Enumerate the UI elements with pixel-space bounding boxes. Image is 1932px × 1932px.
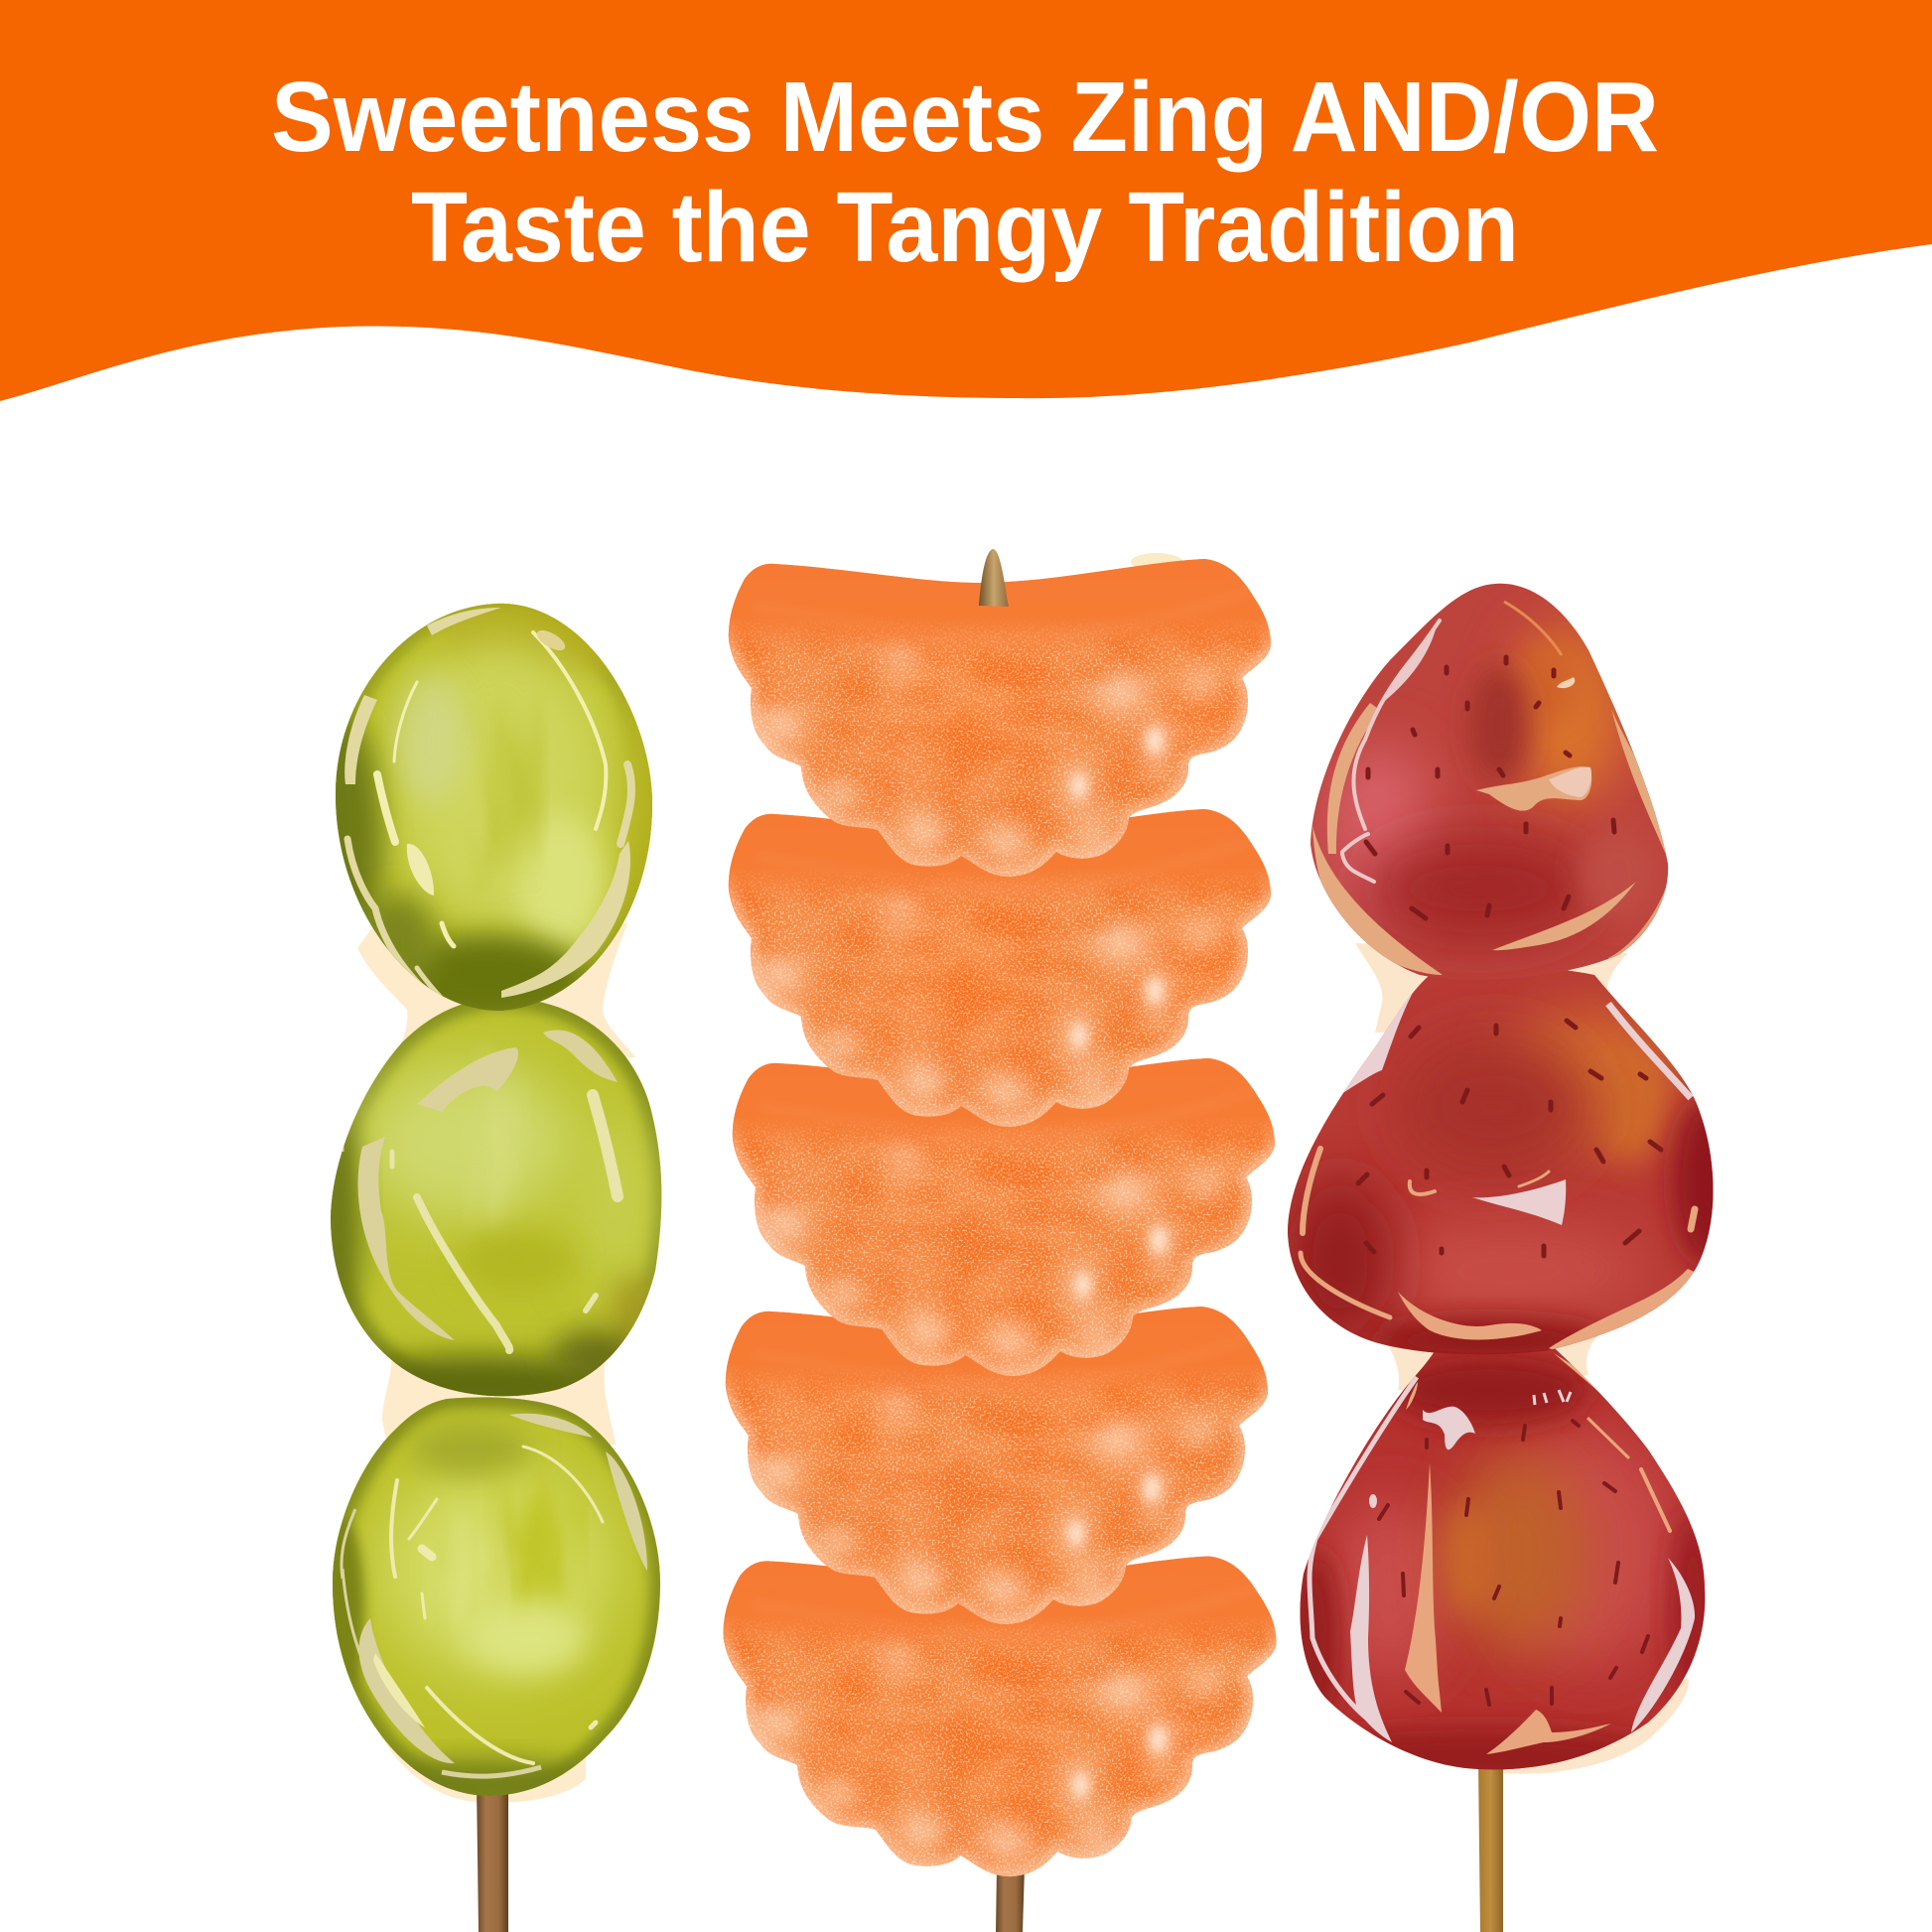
orange candied segment skewer [709, 549, 1297, 1932]
wooden stick below bottom segment [996, 1866, 1025, 1932]
title line 1: Sweetness Meets Zing AND/OR [271, 62, 1659, 173]
orange segment 1 [715, 551, 1291, 889]
orange segment 2 [715, 801, 1291, 1139]
stick tip above top segment [979, 549, 1009, 607]
title line 2: Taste the Tangy Tradition [411, 172, 1519, 283]
red fruit 2 [1286, 967, 1742, 1362]
red fruit skewer [1286, 584, 1742, 1932]
green fruit 2 [318, 998, 661, 1415]
orange segment 4 [712, 1299, 1288, 1636]
orange segment 5 [709, 1548, 1297, 1888]
wooden stick under red fruit [1478, 1762, 1503, 1932]
cream sugar halo behind green fruit [357, 894, 635, 1803]
title [271, 62, 1659, 283]
orange segment 3 [719, 1050, 1295, 1388]
orange header banner with wavy bottom edge [0, 0, 1932, 401]
cream sugar fleck behind top segment [1131, 553, 1182, 571]
wooden stick under green fruit [477, 1782, 508, 1932]
green fruit 3 [321, 1397, 660, 1804]
cream sugar halo behind red fruit [1355, 943, 1689, 1774]
green fruit 1 [336, 604, 652, 1011]
green fruit skewer [331, 604, 661, 1932]
red fruit 3 [1301, 1348, 1706, 1769]
red fruit 1 [1311, 584, 1672, 985]
